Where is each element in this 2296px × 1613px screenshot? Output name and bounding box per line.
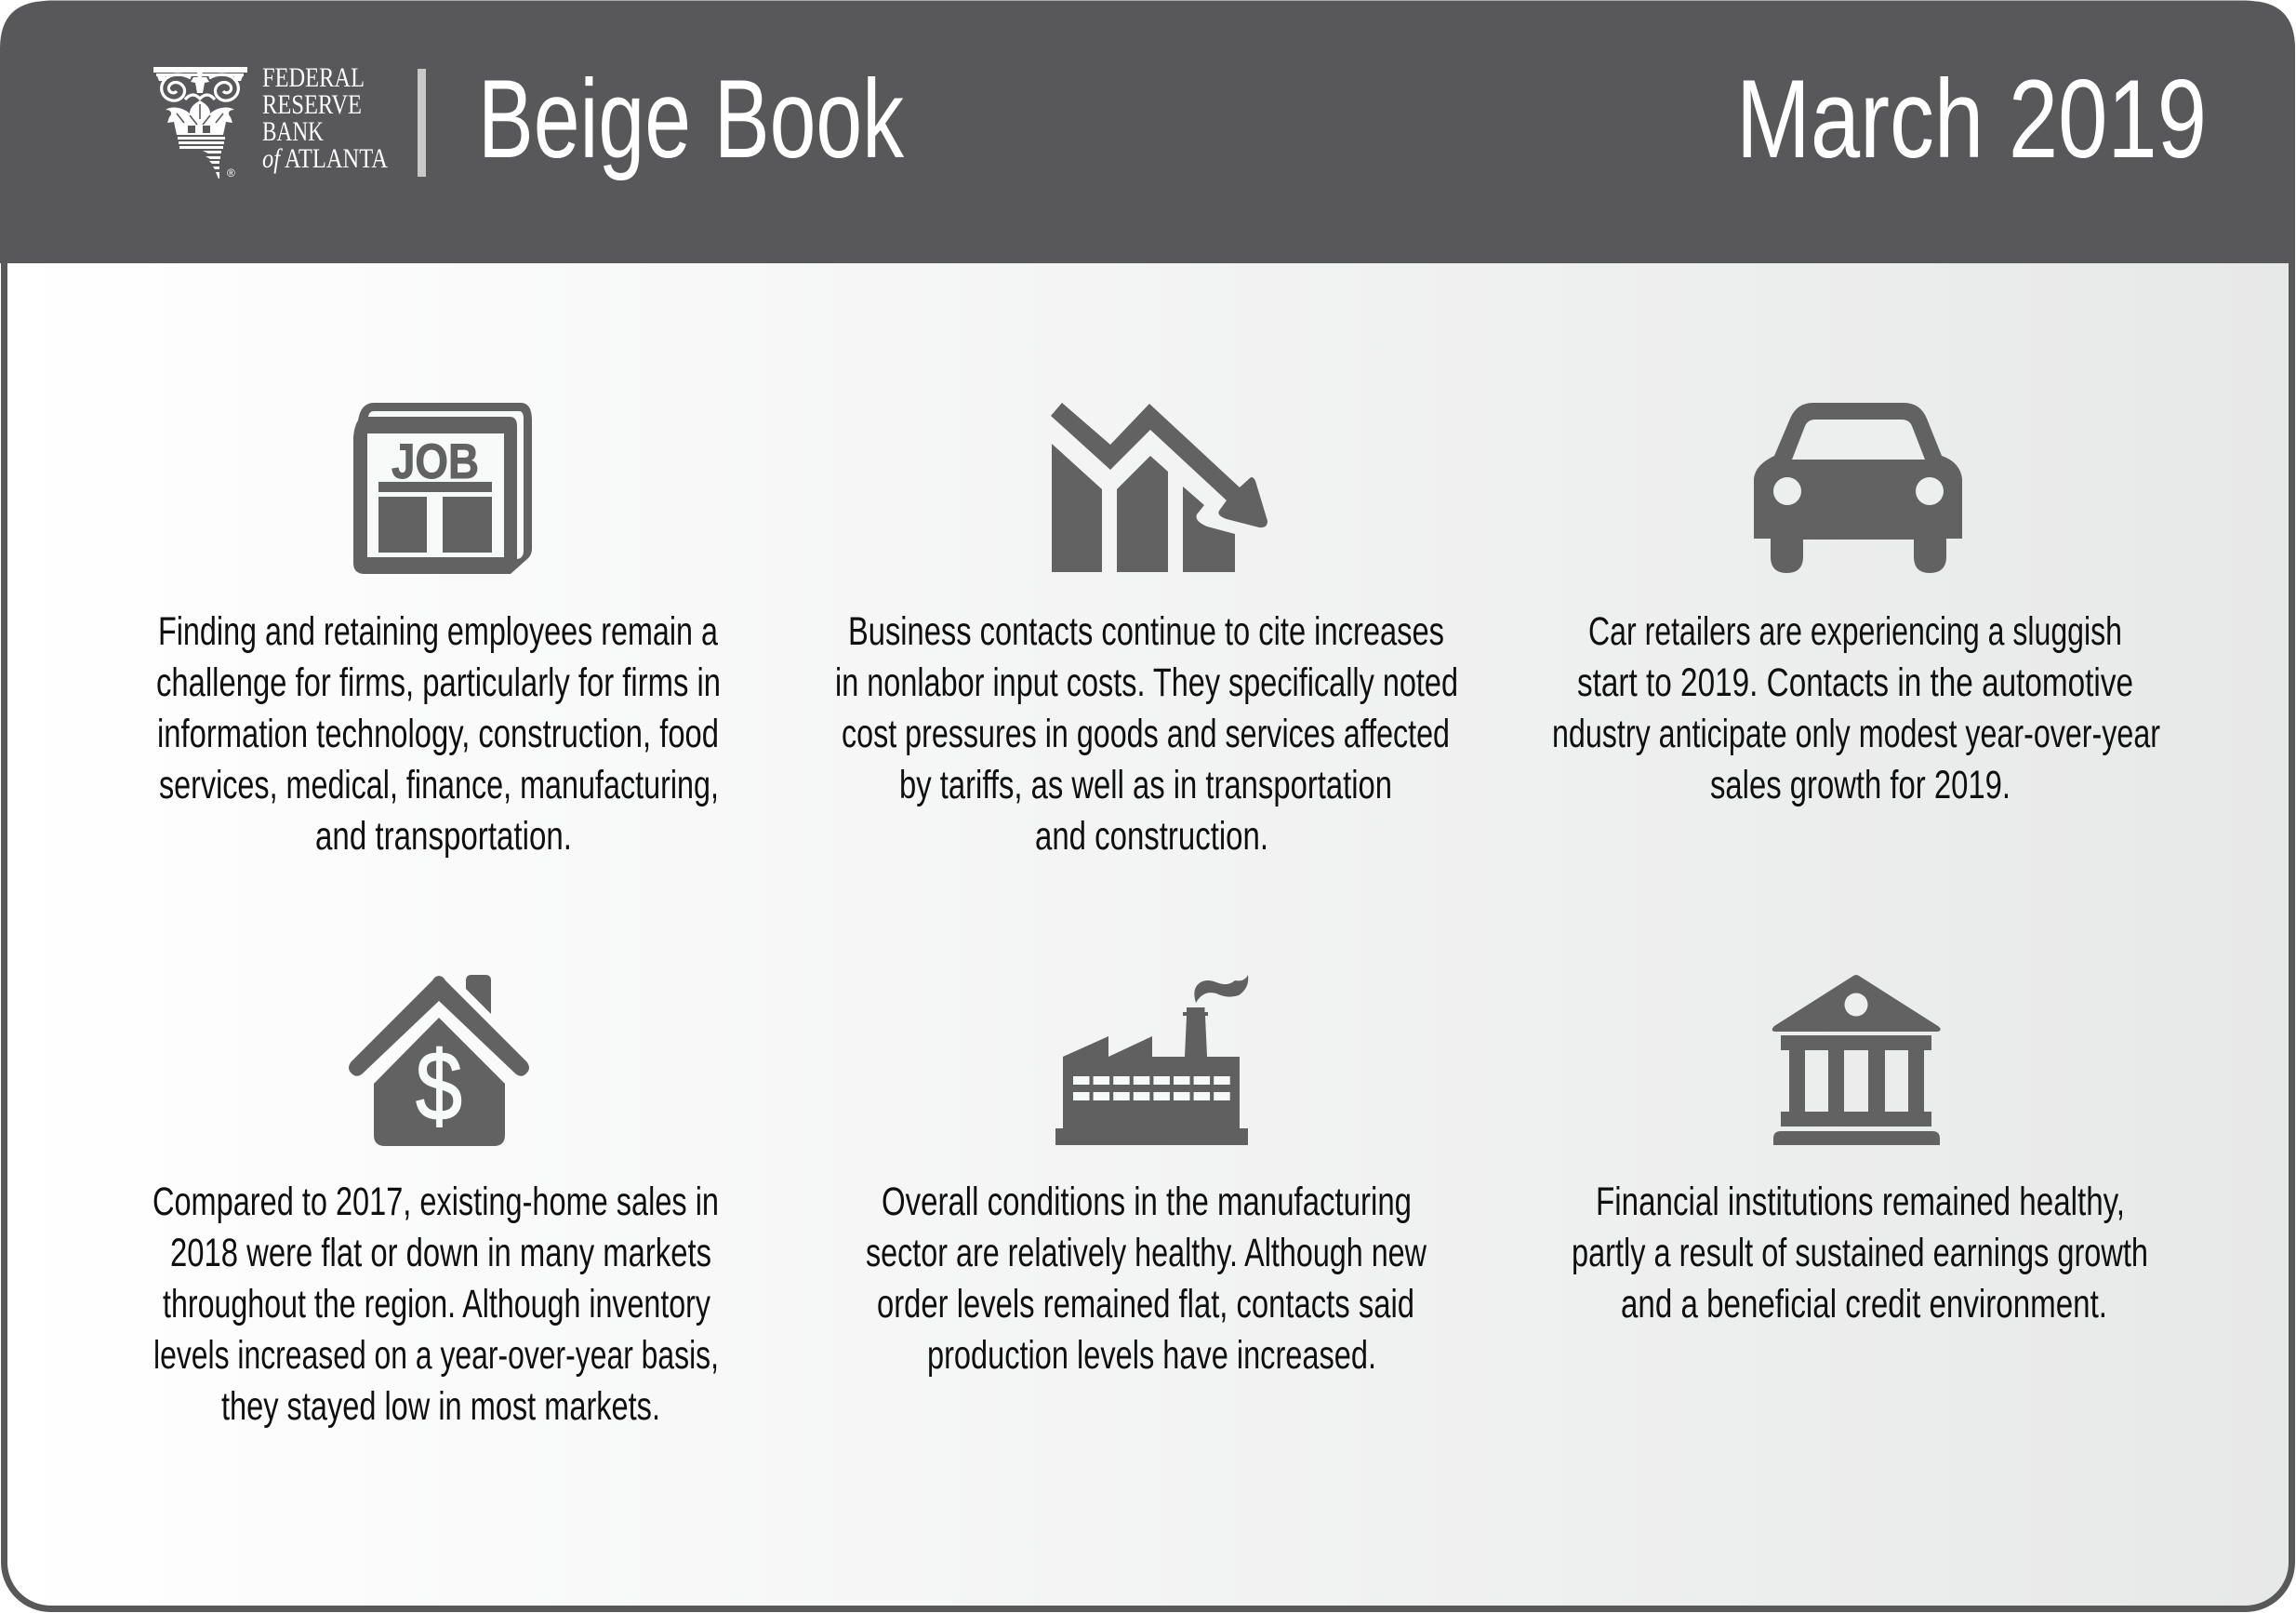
text: housing [153,1180,719,1429]
icon: bank building [1772,975,1941,1145]
panel: housing [153,975,719,1429]
icon: falling chart [1051,403,1267,572]
title: Beige Book [478,57,905,181]
header divider [418,69,426,177]
header band [0,1,2295,263]
text: manufacturing: sector are relatively healthy. Although new [866,1231,1427,1275]
text: auto: Car retailers are experiencing a sluggish [1588,609,2122,654]
text: finance [1572,1180,2148,1326]
icon: house with dollar: $ [416,1032,462,1141]
text: housing: 2018 were flat or down in many markets [170,1231,711,1275]
icon: job newspaper: JOB [392,434,479,489]
text: employment: services, medical, finance, manufacturing, [159,763,719,807]
text: finance: and a beneficial credit environment. [1621,1282,2107,1326]
panel: auto [1552,403,2160,807]
text: manufacturing: order levels remained flat, contacts said [877,1282,1414,1326]
text: input costs: and construction. [1035,814,1268,859]
wordmark: RESERVE [262,89,362,120]
wordmark: FEDERAL [262,62,365,93]
header logo: Federal Reserve Bank of Atlanta [153,62,388,180]
text: input costs: in nonlabor input costs. They specifically noted [835,660,1458,705]
text: housing: throughout the region. Although inventory [163,1282,710,1326]
panel: manufacturing [866,975,1427,1378]
panel: employment [156,403,721,859]
wordmark [262,62,388,174]
text: employment [156,609,721,859]
icon: job newspaper [353,403,532,574]
icon: factory [1055,975,1248,1145]
text: finance: Financial institutions remained healthy, [1596,1180,2125,1224]
text: manufacturing: Overall conditions in the manufacturing [882,1180,1412,1224]
text: input costs [835,609,1458,859]
text: housing: levels increased on a year-over-year basis, [153,1333,719,1378]
text: manufacturing [866,1180,1427,1378]
text: employment: and transportation. [315,814,572,859]
text: employment: challenge for firms, particularly for firms in [156,660,721,705]
wordmark: of ATLANTA [262,143,388,174]
text: input costs: by tariffs, as well as in transportation [899,763,1392,807]
icon: house with dollar [349,975,529,1146]
registered mark: ® [227,167,235,180]
text: housing: they stayed low in most markets. [221,1384,660,1429]
icon: column capital [153,67,247,179]
text: input costs: cost pressures in goods and services affected [842,712,1450,756]
panel: input costs [835,403,1458,859]
text: employment: information technology, construction, food [157,712,719,756]
text: employment: Finding and retaining employees remain a [158,609,718,654]
icon: car [1754,403,1962,573]
text: auto: sales growth for 2019. [1710,763,2011,807]
text: manufacturing: production levels have increased. [927,1333,1376,1378]
text: auto [1552,609,2160,807]
text: input costs: Business contacts continue to cite increases [848,609,1444,654]
wordmark: BANK [262,116,324,147]
panel: finance [1572,975,2148,1326]
text: housing: Compared to 2017, existing-home sales in [153,1180,719,1224]
text: auto: start to 2019. Contacts in the automotive [1577,660,2133,705]
